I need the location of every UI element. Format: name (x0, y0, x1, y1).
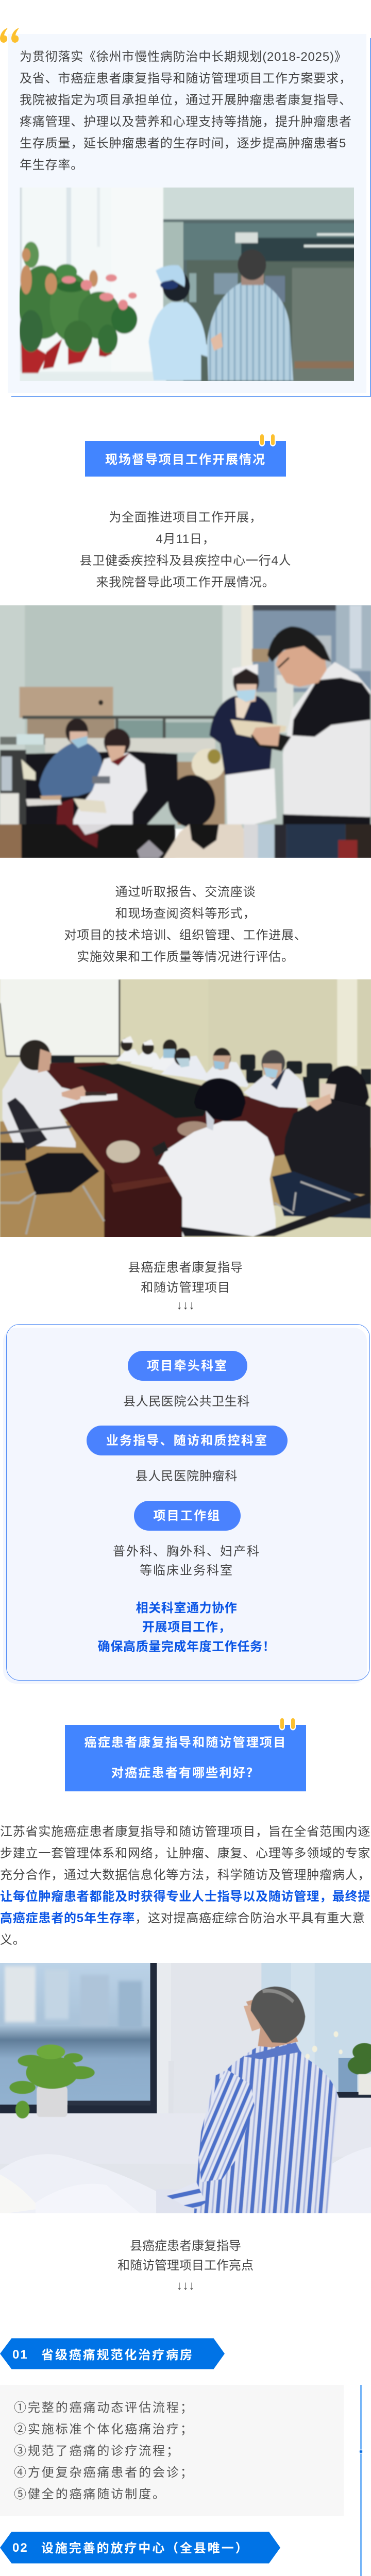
intro text: 疼痛管理、护理以及营养和心理支持等措施，提升肿瘤患者 (20, 115, 352, 129)
text: collaboration callout: 开展项目工作， (142, 1620, 231, 1634)
text: 01 list: ③规范了癌痛的诊疗流程； (14, 2444, 180, 2458)
pill: guidance departments (87, 1426, 288, 1455)
text: 01 list: ④方便复杂癌痛患者的会诊； (14, 2466, 194, 2480)
intro text: 年生存率。 (20, 158, 83, 172)
text: supervision intro: 县卫健委疾控科及县疾控中心一行4人 (80, 554, 291, 568)
text: 01 list: ①完整的癌痛动态评估流程； (14, 2401, 194, 2415)
text: 01 list: ⑤健全的癌痛随访制度。 (14, 2487, 166, 2501)
text: benefits paragraph: 义。 (0, 1933, 26, 1947)
text: work group members (113, 1545, 260, 1578)
heading bar (65, 1725, 306, 1791)
intro text: 我院被指定为项目承担单位，通过开展肿瘤患者康复指导、 (20, 93, 352, 107)
text: assessment methods (64, 885, 307, 964)
text: guidance department name: 县人民医院肿瘤科 (136, 1469, 238, 1483)
heading bar (85, 441, 286, 477)
text: collaboration callout: 相关科室通力协作 (136, 1601, 237, 1615)
text: project name (128, 1260, 243, 1312)
text: highlights heading (117, 2239, 254, 2293)
text: highlights heading: 县癌症患者康复指导 (130, 2239, 241, 2253)
pill: guidance departments: 业务指导、随访和质控科室 (106, 1434, 268, 1448)
banner: 01: 省级癌痛规范化治疗病房 (41, 2348, 194, 2362)
photo: nurse walking patient (20, 188, 354, 381)
intro text (20, 50, 352, 172)
text: supervision intro: 来我院督导此项工作开展情况。 (96, 575, 275, 589)
banner: 02 (0, 2532, 280, 2564)
heading bar: 现场督导项目工作开展情况 (105, 453, 266, 467)
banner: 01 (0, 2338, 225, 2369)
decorative timeline (360, 2385, 362, 2576)
text: assessment methods: 和现场查阅资料等形式， (115, 907, 256, 921)
text: work group members: 等临床业务科室 (140, 1563, 233, 1578)
panel: intro (0, 28, 371, 397)
text: 01 list (14, 2401, 194, 2501)
text: benefits paragraph: 步建立一套管理体系和网络，让肿瘤、康复、心理等多领域的专家 (0, 1846, 370, 1860)
text: supervision intro: 为全面推进项目工作开展， (109, 511, 262, 524)
text: highlights heading: 和随访管理项目工作亮点 (117, 2259, 254, 2273)
text: assessment methods: 实施效果和工作质量等情况进行评估。 (77, 950, 294, 964)
text: assessment methods: 对项目的技术培训、组织管理、工作进展、 (64, 928, 307, 942)
heading bar: 对癌症患者有哪些利好？ (111, 1766, 260, 1780)
icon: timeline dot 1 (359, 2449, 363, 2454)
text: collaboration callout (98, 1601, 275, 1654)
icon: binder tabs (279, 1718, 296, 1730)
text: benefits paragraph: 江苏省实施癌症患者康复指导和随访管理项目，旨在全省范围内逐 (0, 1825, 370, 1839)
text: benefits paragraph: 充分合作，通过大数据信息化等方法，科学随访及管理肿瘤病人， (0, 1868, 370, 1882)
text: 01 list: ②实施标准个体化癌痛治疗； (14, 2422, 194, 2436)
banner: 02: 设施完善的放疗中心（全县唯一） (41, 2541, 249, 2555)
pill: lead department: 项目牵头科室 (147, 1359, 228, 1373)
pill: work group (134, 1501, 240, 1531)
banner: 02: 02 (12, 2541, 28, 2555)
photo: supervisors in office (0, 605, 371, 858)
text: benefits paragraph (0, 1825, 370, 1947)
intro text: 为贯彻落实《徐州市慢性病防治中长期规划(2018-2025)》 (20, 50, 347, 64)
pill: work group: 项目工作组 (154, 1509, 221, 1523)
heading bar: 癌症患者康复指导和随访管理项目 (85, 1736, 286, 1750)
photo: patient on bed by window (0, 1963, 371, 2213)
intro text: 及省、市癌症患者康复指导和随访管理项目工作方案要求， (20, 72, 352, 86)
text: project name: 县癌症患者康复指导 (128, 1260, 243, 1275)
icon: quotation mark (0, 28, 19, 43)
photo: conference meeting (0, 979, 371, 1237)
pill: lead department (128, 1351, 247, 1381)
panel background (3, 1328, 367, 1684)
text: collaboration callout: 确保高质量完成年度工作任务！ (98, 1640, 275, 1654)
banner: 01: 01 (12, 2348, 28, 2362)
panel background (8, 34, 366, 393)
icon: binder tabs (259, 434, 276, 446)
text: lead department name: 县人民医院公共卫生科 (123, 1395, 250, 1409)
text: supervision intro: 4月11日， (156, 532, 215, 546)
panel: departments (3, 1324, 370, 1684)
text: supervision intro (80, 511, 291, 589)
text: benefits paragraph: 高癌症患者的5年生存率，这对提高癌症综合防治水平具有重大意 (0, 1911, 365, 1925)
text: work group members: 普外科、胸外科、妇产科 (113, 1545, 260, 1558)
heading: project benefits (65, 1718, 306, 1791)
panel outline (11, 38, 371, 397)
intro text: 生存质量，延长肿瘤患者的生存时间，逐步提高肿瘤患者5 (20, 137, 346, 150)
heading: on-site supervision (85, 434, 286, 477)
icon: down arrows: ↓↓↓ (176, 1298, 195, 1312)
panel: 01 content (0, 2385, 344, 2516)
text: benefits paragraph: 让每位肿瘤患者都能及时获得专业人士指导以及随访管理，最终提 (0, 1890, 370, 1904)
text: assessment methods: 通过听取报告、交流座谈 (115, 885, 256, 899)
icon: down arrows: ↓↓↓ (176, 2279, 195, 2293)
panel outline (6, 1324, 370, 1681)
text: project name: 和随访管理项目 (141, 1281, 230, 1294)
